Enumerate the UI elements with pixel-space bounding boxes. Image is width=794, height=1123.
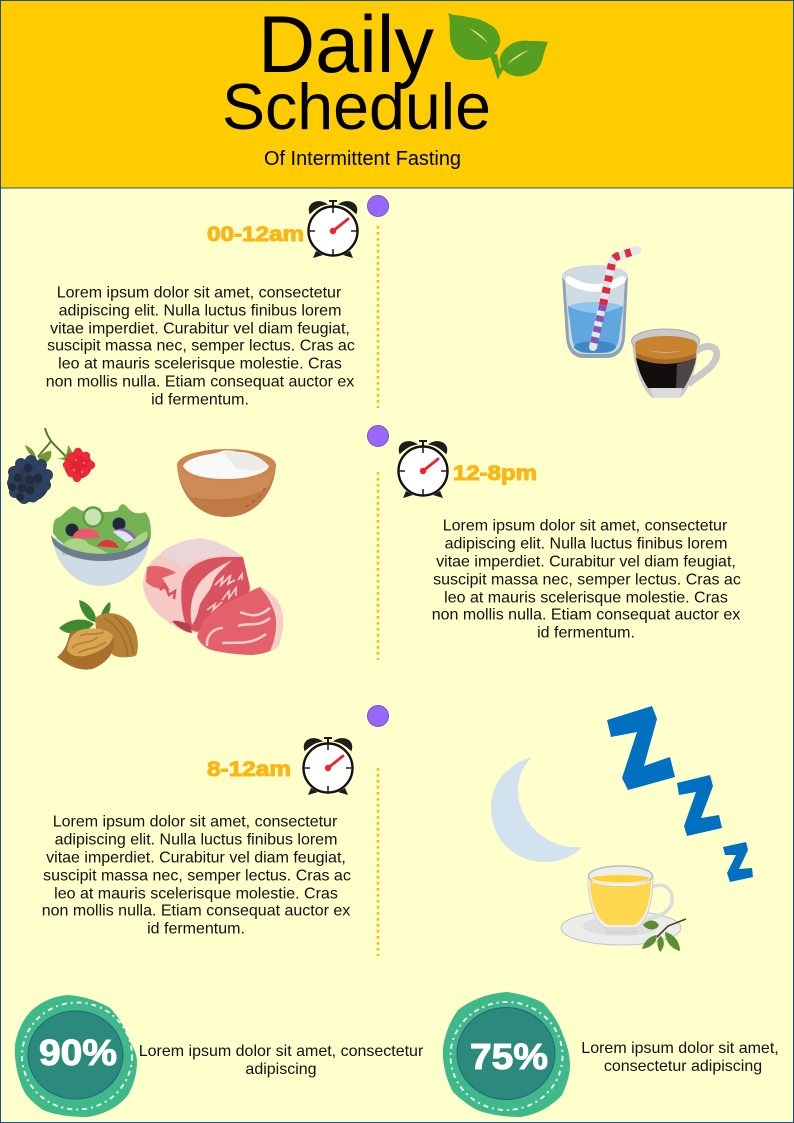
icon: green leaves xyxy=(448,13,548,80)
timeline dot 2 xyxy=(368,426,388,446)
section 2 text: Lorem ipsum dolor sit amet, consectetur xyxy=(443,518,728,535)
coffee cup xyxy=(632,329,717,398)
badge: 90% xyxy=(15,995,137,1117)
timeline dotted line 2 xyxy=(377,472,379,660)
title: Daily: Daily xyxy=(258,0,434,90)
section 1 text: vitae imperdiet. Curabitur vel diam feugiat, xyxy=(50,321,350,338)
section 1 text: leo at mauris scelerisque molestie. Cras xyxy=(58,356,342,373)
header band xyxy=(0,0,794,188)
icon: bowl of flour xyxy=(177,449,276,517)
badge text right xyxy=(581,1040,779,1075)
section 2 text: suscipit massa nec, semper lectus. Cras ac xyxy=(433,572,741,589)
section 3 text: adipiscing elit. Nulla luctus finibus lorem xyxy=(55,832,337,849)
section 1 text: suscipit massa nec, semper lectus. Cras ac xyxy=(47,338,355,355)
section 3: 8-12am time label: 8-12am xyxy=(207,758,291,781)
badge: 90%: 90% xyxy=(39,1032,117,1073)
icon: raw meat xyxy=(143,538,283,655)
icon: clock 2 xyxy=(398,441,448,498)
section 1 text: Lorem ipsum dolor sit amet, consectetur xyxy=(57,285,342,302)
section 3 text: id fermentum. xyxy=(147,921,245,938)
badge: 75% xyxy=(443,992,570,1117)
icon: salad bowl xyxy=(51,504,151,586)
section 1: 00-12am time label: 00-12am xyxy=(207,223,304,246)
timeline dotted line 1 xyxy=(377,226,379,408)
badge: 75%: 75% xyxy=(470,1036,548,1077)
timeline dot 1 xyxy=(368,196,388,216)
section 2 text: vitae imperdiet. Curabitur vel diam feugiat, xyxy=(436,554,736,571)
icon: water glass and coffee cup xyxy=(562,250,717,398)
icon: walnut xyxy=(57,600,138,670)
section 3 text: Lorem ipsum dolor sit amet, consectetur xyxy=(53,814,338,831)
badge text right: Lorem ipsum dolor sit amet, xyxy=(581,1040,779,1057)
timeline dot 3 xyxy=(368,706,388,726)
section 3 text: leo at mauris scelerisque molestie. Cras xyxy=(54,886,338,903)
section 3 text: suscipit massa nec, semper lectus. Cras ac xyxy=(43,868,351,885)
badge text left: Lorem ipsum dolor sit amet, consectetur xyxy=(139,1043,424,1060)
section 2 text: non mollis nulla. Etiam consequat auctor ex xyxy=(432,607,740,624)
section 1 text xyxy=(46,285,355,409)
section 3 text: non mollis nulla. Etiam consequat auctor ex xyxy=(42,903,350,920)
badge text right: consectetur adipiscing xyxy=(604,1058,762,1075)
section 1 text: id fermentum. xyxy=(151,392,249,409)
icon: crescent moon xyxy=(491,757,582,862)
section 3 text xyxy=(42,814,351,938)
icon: clock 1 xyxy=(308,201,358,258)
icon: berries xyxy=(7,428,95,504)
straw xyxy=(593,250,637,347)
section 2 text xyxy=(432,518,741,642)
badge text left xyxy=(139,1043,424,1078)
title: Schedule: Schedule xyxy=(222,70,491,143)
section 2 text: adipiscing elit. Nulla luctus finibus lorem xyxy=(445,536,727,553)
section 2 text: id fermentum. xyxy=(537,625,635,642)
section 1 text: non mollis nulla. Etiam consequat auctor ex xyxy=(46,374,354,391)
section 1 text: adipiscing elit. Nulla luctus finibus lorem xyxy=(59,303,341,320)
section 2: 12-8pm time label: 12-8pm xyxy=(453,462,537,485)
badge text left: adipiscing xyxy=(245,1061,317,1078)
timeline dotted line 3 xyxy=(377,768,379,956)
subtitle: Of Intermittent Fasting xyxy=(264,148,461,170)
section 2 text: leo at mauris scelerisque molestie. Cras xyxy=(444,590,728,607)
icon: clock 3 xyxy=(304,738,352,795)
icon: cup of tea on saucer xyxy=(561,866,686,952)
icon: sleep Z letters xyxy=(607,706,753,882)
glass xyxy=(562,265,628,358)
section 3 text: vitae imperdiet. Curabitur vel diam feugiat, xyxy=(46,850,346,867)
